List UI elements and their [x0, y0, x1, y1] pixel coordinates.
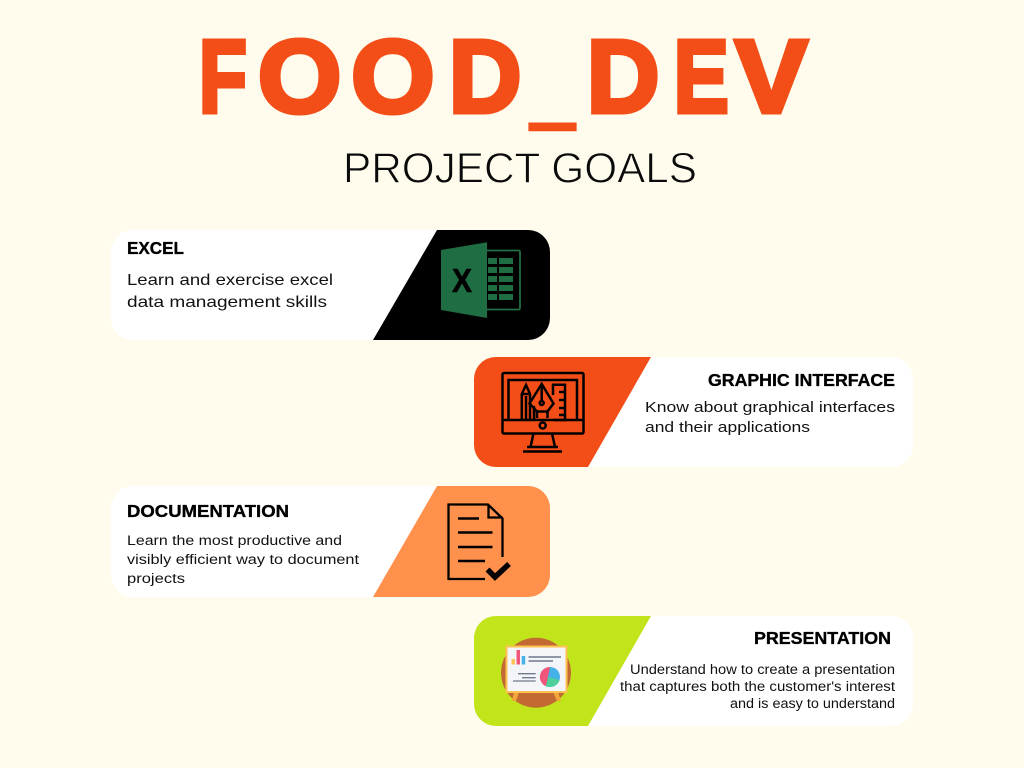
icon: excel logo [441, 242, 520, 318]
title [199, 15, 807, 140]
title: V [735, 19, 807, 134]
title: O [258, 20, 341, 135]
panel: presentation [474, 616, 913, 726]
title: F [199, 20, 247, 135]
text: excel description: Learn and exercise excel [127, 272, 333, 289]
text: graphic interface description: Know about graphical interfaces [645, 400, 895, 416]
subtitle: PROJECT GOALS [343, 144, 697, 192]
text: graphic interface description [645, 400, 895, 436]
icon: excel logo: X [452, 262, 472, 299]
text: presentation description [620, 662, 895, 711]
text: documentation description: Learn the most productive and [127, 533, 342, 548]
text: documentation description: projects [127, 571, 185, 586]
panel: documentation [111, 486, 550, 597]
heading: documentation: DOCUMENTATION [127, 501, 289, 521]
heading: presentation: PRESENTATION [754, 628, 891, 648]
heading: graphic interface: GRAPHIC INTERFACE [708, 370, 895, 390]
title: O [351, 20, 435, 135]
text: presentation description: and is easy to understand [730, 696, 895, 711]
title: E [674, 19, 729, 134]
title: D [449, 19, 521, 134]
heading: excel: EXCEL [127, 238, 184, 258]
text: excel description: data management skills [127, 294, 327, 311]
text: presentation description: Understand how to create a presentation [630, 662, 895, 677]
title: _ [530, 15, 575, 140]
icon: monitor with design tools [502, 373, 584, 452]
text: excel description [127, 272, 333, 311]
panel: excel [111, 230, 550, 340]
text: graphic interface description: and their applications [645, 420, 810, 436]
panel: graphic interface [474, 357, 913, 467]
text: documentation description [127, 533, 359, 586]
icon: presentation board [501, 638, 571, 708]
text: presentation description: that captures both the customer's interest [620, 679, 895, 694]
text: documentation description: visibly efficient way to document [127, 552, 359, 567]
title: D [587, 19, 659, 134]
icon: document with check mark [448, 504, 509, 579]
